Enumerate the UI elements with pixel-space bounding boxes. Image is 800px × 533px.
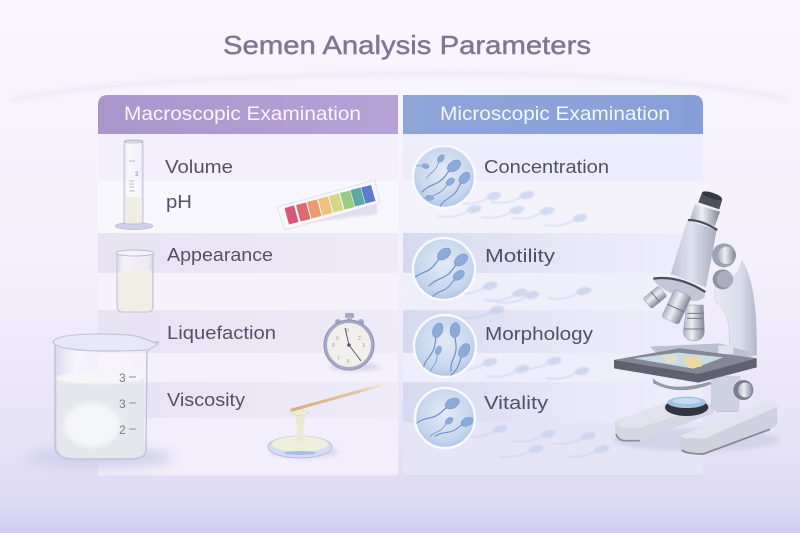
label: Motility: Motility [485, 245, 556, 266]
label: Appearance: Appearance [167, 244, 273, 265]
icon: stopwatch: 8 [332, 343, 335, 349]
title: Semen Analysis Parameters [223, 30, 591, 60]
condenser filter [665, 397, 708, 416]
panel: macroscopic examination [98, 95, 398, 477]
label: Volume: Volume [165, 156, 233, 177]
panel header: macroscopic: Macroscopic Examination [124, 104, 361, 125]
label: Liquefaction: Liquefaction [167, 322, 276, 343]
icon: large beaker with sample: 3 [119, 371, 126, 385]
label: pH: pH [166, 191, 192, 212]
icon: spatula and petri dish [268, 385, 382, 458]
label: Viscosity: Viscosity [167, 389, 246, 410]
label: Vitality: Vitality [484, 392, 549, 413]
icon: morphology sample [406, 315, 590, 386]
icon: stopwatch [324, 313, 381, 371]
objective lenses [643, 278, 705, 341]
microscope stage [614, 343, 757, 390]
label: Morphology: Morphology [485, 323, 594, 344]
icon: pH test strip [277, 180, 380, 230]
focus knobs [712, 243, 753, 400]
panel: microscopic examination [403, 95, 703, 477]
icon: large beaker with sample [26, 334, 174, 467]
icon: stopwatch: 7 [337, 356, 340, 362]
icon: stopwatch: 3 [362, 343, 365, 349]
icon: motility sample [412, 238, 592, 318]
microscope tube and eyepiece [671, 190, 723, 287]
panel header: microscopic [403, 95, 703, 134]
icon: microscope [613, 190, 780, 454]
icon: graduated cylinder: 3 [135, 172, 139, 178]
icon: small beaker [116, 250, 154, 312]
icon: graduated cylinder [115, 140, 153, 230]
icon: stopwatch: 0 [346, 328, 349, 334]
icon: vitality sample [415, 388, 610, 457]
microscope base [615, 402, 777, 454]
label: Concentration: Concentration [484, 156, 609, 177]
icon: large beaker with sample: 2 [119, 423, 126, 437]
microscope arm [715, 260, 757, 357]
icon: concentration sample [405, 146, 588, 226]
panel header: macroscopic [98, 95, 398, 134]
icon: stopwatch: 9 [336, 336, 339, 342]
icon: stopwatch: 2 [358, 336, 361, 342]
icon: large beaker with sample: 3 [119, 397, 126, 411]
panel header: microscopic: Microscopic Examination [440, 104, 670, 125]
icon: stopwatch: 6 [347, 359, 350, 365]
